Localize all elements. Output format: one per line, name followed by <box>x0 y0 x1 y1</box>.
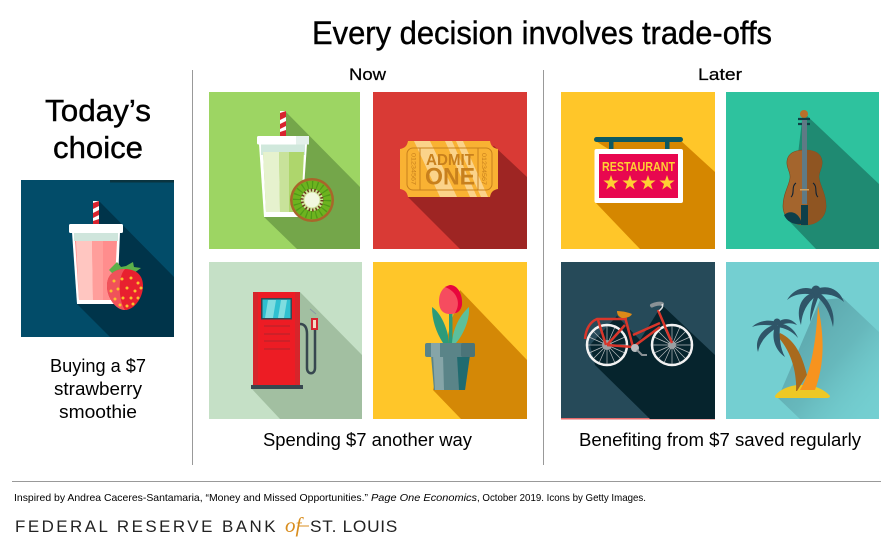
heading: now: Now <box>349 65 387 84</box>
panel: potted tulip <box>373 262 527 419</box>
footer source <box>14 492 646 504</box>
caption: benefiting saved: Benefiting from $7 saved regularly <box>579 429 862 450</box>
caption: buying smoothie: strawberry <box>54 378 143 399</box>
caption: buying smoothie: smoothie <box>59 401 137 422</box>
footer source: Inspired by Andrea Caceres-Santamaria, “Money and Missed Opportunities.” <box>14 492 368 504</box>
panel: kiwi smoothie <box>209 92 360 249</box>
panel: palm trees <box>726 262 879 419</box>
heading: later: Later <box>698 65 742 84</box>
panel: restaurant sign <box>561 92 715 249</box>
logo: federal reserve bank of st. louis: of <box>285 513 304 537</box>
logo: federal reserve bank of st. louis <box>15 513 398 537</box>
heading: today's choice: Today’s <box>45 93 151 128</box>
logo: federal reserve bank of st. louis: ST. LOUIS <box>310 517 398 536</box>
footer source: , October 2019. Icons by Getty Images. <box>477 492 646 504</box>
caption: buying smoothie: Buying a $7 <box>50 355 146 376</box>
panel: admit one ticket <box>373 92 527 249</box>
logo: federal reserve bank of st. louis: FEDERAL RESERVE BANK <box>15 517 278 536</box>
title: Every decision involves trade-offs <box>312 15 772 51</box>
panel: admit one ticket: ONE <box>425 164 475 190</box>
heading: today's choice <box>45 93 151 165</box>
panel: admit one ticket: 01234567 <box>480 153 486 186</box>
panel: admit one ticket: 01234567 <box>410 153 416 186</box>
panel: admit one ticket: ADMIT <box>426 152 475 169</box>
panel: strawberry smoothie <box>21 180 174 337</box>
heading: today's choice: choice <box>53 130 143 165</box>
caption: spending another way: Spending $7 another way <box>263 429 473 450</box>
panel: restaurant sign: RESTAURANT <box>602 160 675 174</box>
panel: bicycle <box>561 262 715 420</box>
caption: buying smoothie <box>50 355 146 422</box>
panel: violin <box>726 92 879 249</box>
footer source: Page One Economics <box>371 492 478 504</box>
panel: gas pump <box>209 262 362 419</box>
